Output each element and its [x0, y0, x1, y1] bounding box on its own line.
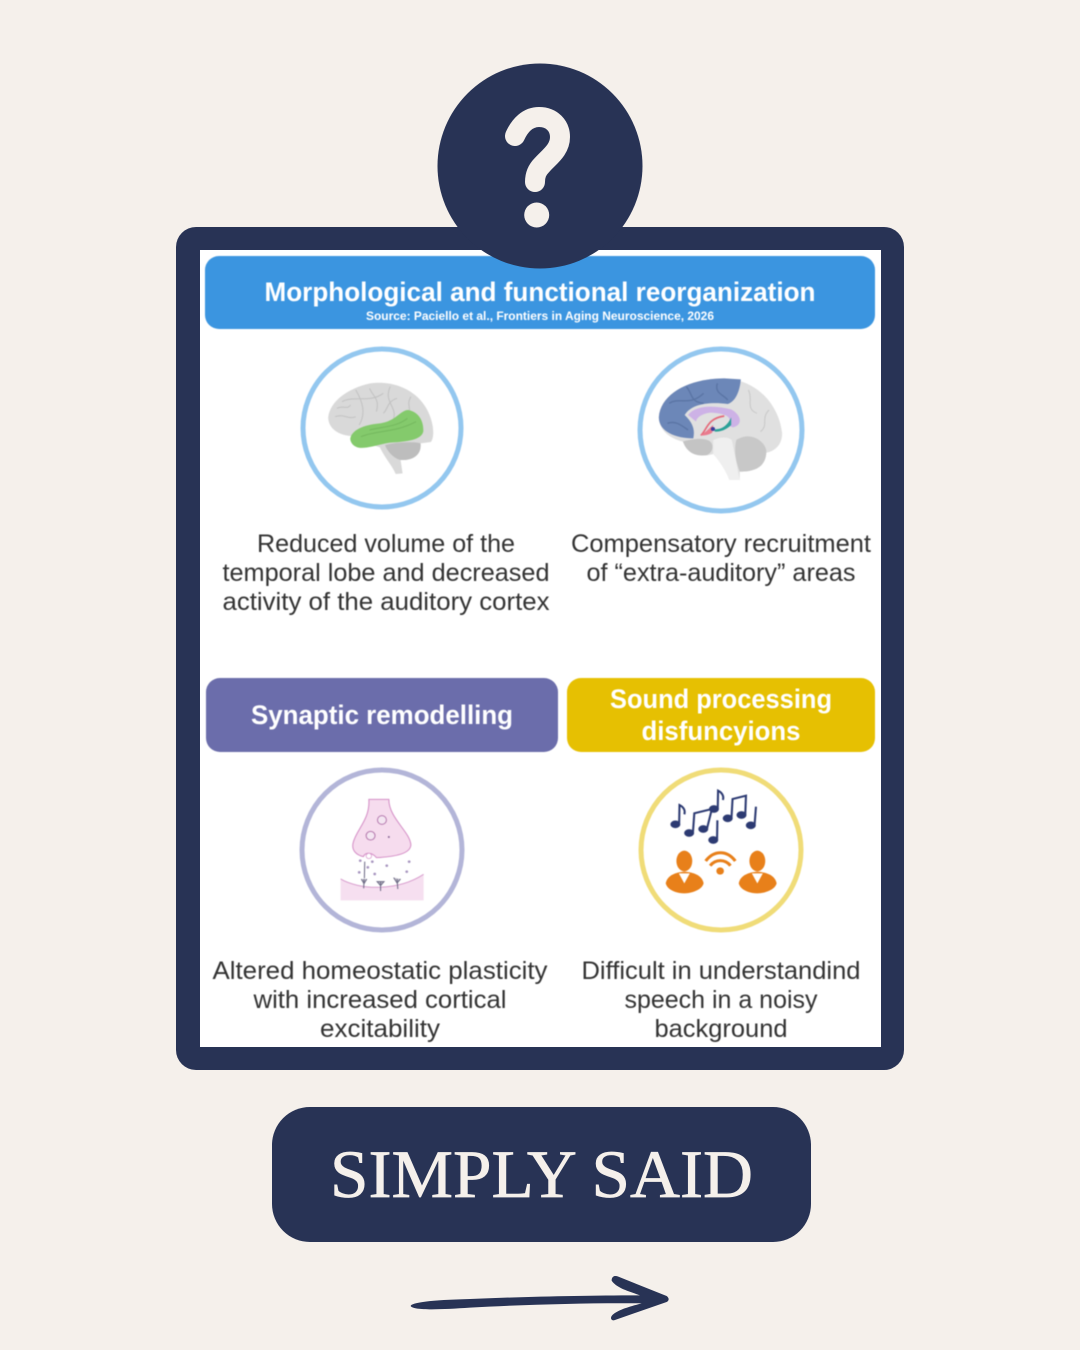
text: homeostatic plasticity: excitability — [320, 1015, 441, 1043]
heading: sound processing: disfuncyions — [642, 716, 800, 746]
heading: sound processing — [567, 678, 875, 752]
heading: morphological and functional reorganization — [205, 256, 875, 329]
heading: synaptic remodelling — [206, 678, 558, 752]
arrow — [411, 1276, 669, 1320]
text: speech in noise — [582, 957, 860, 1043]
icon: question mark badge — [438, 64, 642, 268]
text: temporal lobe: temporal lobe and decreased — [222, 559, 550, 587]
text: extra-auditory areas — [571, 530, 871, 587]
text: temporal lobe: activity of the auditory cortex — [222, 588, 550, 616]
text: temporal lobe: Reduced volume of the — [257, 530, 515, 558]
text: homeostatic plasticity — [212, 957, 548, 1043]
icon: synapse — [302, 770, 462, 930]
text: extra-auditory areas: Compensatory recruitment — [571, 530, 871, 558]
heading: synaptic remodelling: Synaptic remodelling — [251, 700, 513, 730]
icon: sagittal brain section — [640, 349, 802, 511]
button: simply said — [272, 1107, 811, 1242]
icon: music notes and listeners — [641, 770, 801, 930]
heading: sound processing: Sound processing — [610, 684, 832, 714]
text: homeostatic plasticity: with increased cortical — [252, 986, 506, 1014]
text: speech in noise: speech in a noisy — [624, 986, 818, 1014]
button: simply said: SIMPLY SAID — [330, 1136, 753, 1212]
panel: framed figure — [176, 227, 904, 1070]
text: speech in noise: Difficult in understandind — [582, 957, 860, 985]
text: temporal lobe — [222, 530, 550, 616]
text: speech in noise: background — [654, 1015, 788, 1043]
icon: brain with temporal lobe highlighted — [303, 349, 461, 507]
heading: morphological and functional reorganization: Source: Paciello et al., Frontiers in Aging Neuroscience, 2026 — [366, 311, 714, 323]
text: homeostatic plasticity: Altered homeostatic plasticity — [212, 957, 548, 985]
text: extra-auditory areas: of “extra-auditory” areas — [586, 559, 856, 587]
heading: morphological and functional reorganization: Morphological and functional reorganization — [264, 277, 816, 307]
